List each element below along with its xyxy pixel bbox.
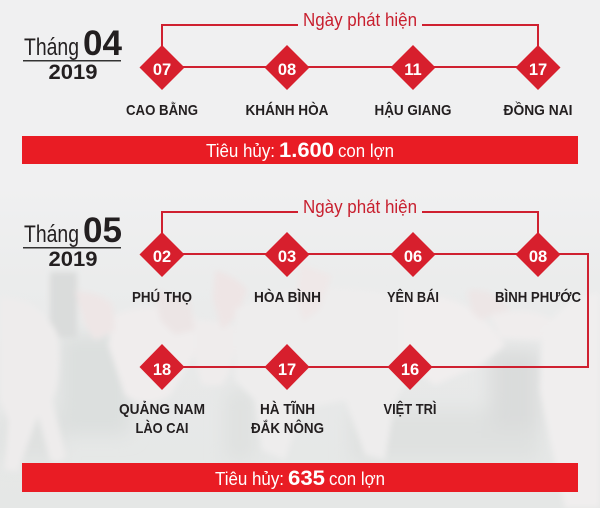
place: BÌNH PHƯỚC: BÌNH PHƯỚC [495, 288, 581, 306]
month heading: Tháng 05: Tháng [24, 221, 79, 248]
section: May 2019 [22, 197, 588, 492]
date marker 17: 17 [278, 361, 296, 379]
month heading: Tháng 04: 2019 [48, 60, 98, 84]
date marker 08 [516, 232, 560, 277]
place: ĐỒNG NAI: ĐỒNG NAI [504, 101, 572, 119]
label: Ngày phát hiện: Ngày phát hiện [303, 10, 417, 30]
left pig [0, 297, 66, 472]
total bar: 1.600 con lợn [22, 136, 578, 164]
month heading: Tháng 04: 04 [83, 24, 123, 63]
date marker 18 [140, 344, 184, 390]
place: HÀ TĨNH, ĐẮK NÔNG [251, 400, 324, 437]
label: Ngày phát hiện: Ngày phát hiện [303, 197, 417, 217]
total bar: 1.600 con lợn: Tiêu hủy: [206, 141, 275, 161]
date marker 18: 18 [153, 361, 171, 379]
place: QUẢNG NAM, LÀO CAI: QUẢNG NAM [119, 401, 205, 418]
place: KHÁNH HÒA: KHÁNH HÒA [246, 101, 329, 119]
date marker 16: 16 [401, 361, 419, 379]
far right pig [540, 292, 600, 508]
date marker 17 [264, 344, 310, 390]
connector lines [162, 25, 538, 67]
date marker 06: 06 [404, 248, 422, 266]
place: HÀ TĨNH, ĐẮK NÔNG: ĐẮK NÔNG [251, 419, 324, 437]
section: April 2019 [22, 10, 578, 164]
month heading: Tháng 05 [23, 211, 122, 271]
date marker 17 [516, 45, 560, 90]
date marker 16 [388, 344, 432, 390]
month heading: Tháng 04: Tháng [24, 34, 79, 61]
place: QUẢNG NAM, LÀO CAI: LÀO CAI [136, 420, 188, 437]
place: CAO BẰNG: CAO BẰNG [126, 101, 198, 119]
total bar: 635 con lợn: 635 [288, 467, 325, 490]
date marker 06 [390, 232, 436, 277]
place: PHÚ THỌ: PHÚ THỌ [132, 288, 192, 306]
date marker 03: 03 [278, 248, 296, 266]
second pig [108, 308, 200, 402]
mesh panel [50, 272, 77, 338]
date marker 08 [264, 45, 310, 90]
date marker 11 [390, 45, 436, 90]
big central pig [235, 288, 420, 460]
month heading: Tháng 04 [23, 24, 123, 84]
place: HẬU GIANG: HẬU GIANG [374, 101, 452, 119]
date marker 02 [140, 232, 184, 277]
date marker 08: 08 [529, 248, 547, 266]
place: HÀ TĨNH, ĐẮK NÔNG: HÀ TĨNH [260, 400, 315, 418]
centre snout pig [195, 320, 240, 385]
place: YÊN BÁI: YÊN BÁI [387, 288, 439, 306]
date marker 17: 17 [529, 61, 547, 79]
total bar: 1.600 con lợn: con lợn [338, 141, 394, 161]
date marker 07 [140, 45, 184, 90]
total bar: 635 con lợn: con lợn [329, 469, 385, 489]
place: QUẢNG NAM, LÀO CAI [119, 401, 205, 437]
place: HÒA BÌNH: HÒA BÌNH [254, 288, 321, 306]
total bar: 1.600 con lợn: 1.600 [279, 139, 334, 162]
total bar: 635 con lợn [22, 463, 578, 492]
right pig head [400, 296, 505, 385]
date marker 08: 08 [278, 61, 296, 79]
date marker 03 [264, 232, 310, 277]
month heading: Tháng 05: 05 [83, 211, 122, 250]
place: VIỆT TRÌ: VIỆT TRÌ [384, 400, 436, 418]
month heading: Tháng 05: 2019 [48, 247, 98, 271]
date marker 02: 02 [153, 248, 171, 266]
total bar: 635 con lợn: Tiêu hủy: [215, 469, 284, 489]
date marker 07: 07 [153, 61, 171, 79]
connector lines [162, 212, 588, 367]
date marker 11: 11 [404, 61, 422, 79]
